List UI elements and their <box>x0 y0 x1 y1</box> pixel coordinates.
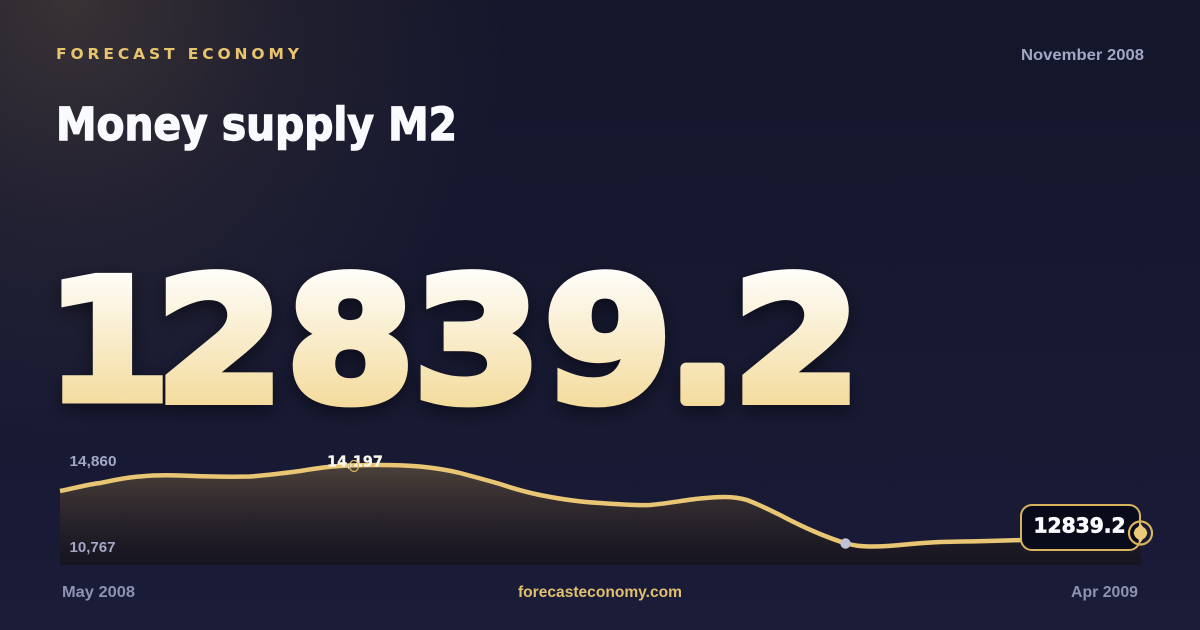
source website: forecasteconomy.com <box>518 584 682 601</box>
low marker <box>840 538 851 549</box>
title: Money supply M2 <box>56 98 457 151</box>
peak value label: 14,197 <box>327 452 383 470</box>
start date label: May 2008 <box>62 584 135 601</box>
axis maximum label: 14,860 <box>70 454 116 470</box>
area chart <box>60 452 1152 565</box>
axis minimum label: 10,767 <box>70 540 116 556</box>
chart area fill <box>60 465 1141 565</box>
current value callout: 12839.2 <box>1034 514 1126 538</box>
peak marker <box>350 460 358 472</box>
current value marker <box>1129 522 1152 544</box>
current value callout <box>1021 505 1140 550</box>
headline value: 12839.2 <box>44 242 861 441</box>
brand label: FORECAST ECONOMY <box>56 45 300 63</box>
chart line <box>60 465 1022 546</box>
date label: November 2008 <box>1021 47 1144 64</box>
end date label: Apr 2009 <box>1071 584 1138 601</box>
